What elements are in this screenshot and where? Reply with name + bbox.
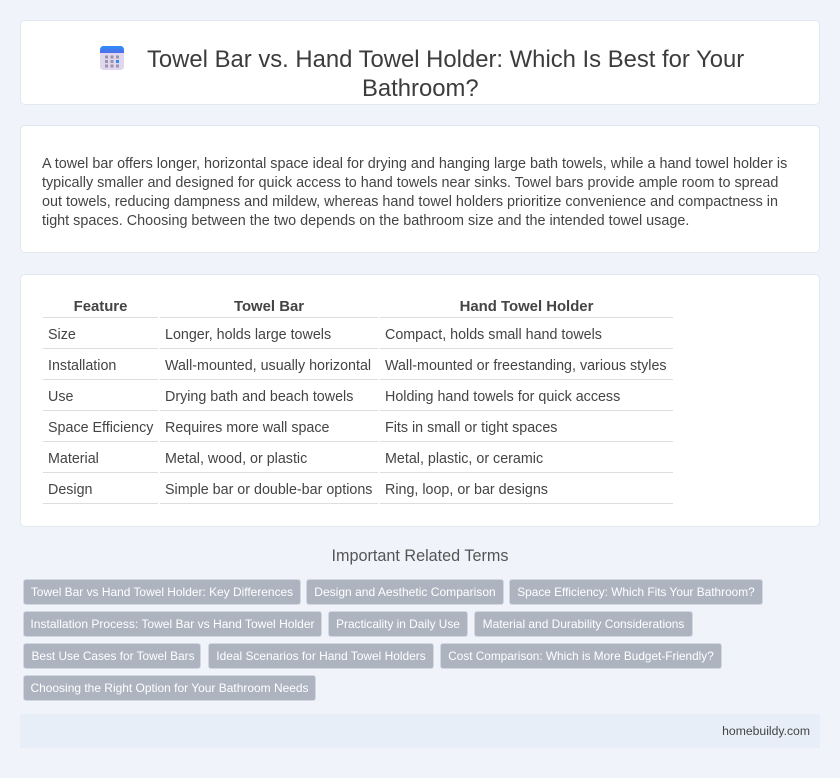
row: material: Metal, plastic, or ceramic xyxy=(385,451,543,467)
row: material: Metal, wood, or plastic xyxy=(165,451,307,467)
intro text xyxy=(42,156,787,229)
panel: comparison table xyxy=(20,274,820,527)
row: design xyxy=(48,482,548,498)
tag xyxy=(474,611,693,637)
heading: related terms: Important Related Terms xyxy=(332,547,508,565)
row: use: Holding hand towels for quick access xyxy=(385,389,620,405)
title: Bathroom? xyxy=(362,75,479,102)
row: installation xyxy=(48,358,667,374)
row: design: Design xyxy=(48,482,93,498)
tag: Practicality in Daily Use xyxy=(336,617,460,631)
title xyxy=(147,46,744,102)
row: size: Compact, holds small hand towels xyxy=(385,327,602,343)
row: material xyxy=(48,451,543,467)
tag: Space Efficiency: Which Fits Your Bathroom? xyxy=(517,585,755,599)
tag xyxy=(23,611,322,637)
row: material: Material xyxy=(48,451,99,467)
row: size: Size xyxy=(48,327,76,343)
row: space efficiency xyxy=(48,420,557,436)
tag xyxy=(208,643,434,669)
row: design: Ring, loop, or bar designs xyxy=(385,482,548,498)
tag: Installation Process: Towel Bar vs Hand Towel Holder xyxy=(30,617,315,631)
row: installation: Wall-mounted or freestanding, various styles xyxy=(385,358,667,374)
tag: Cost Comparison: Which is More Budget-Friendly? xyxy=(448,649,714,663)
table headers: Hand Towel Holder xyxy=(460,299,593,315)
row: use: Use xyxy=(48,389,73,405)
row: space efficiency: Space Efficiency xyxy=(48,420,153,436)
table headers xyxy=(74,299,594,315)
row: installation: Wall-mounted, usually horizontal xyxy=(165,358,371,374)
row: installation: Installation xyxy=(48,358,116,374)
table headers: Feature xyxy=(74,299,127,315)
row: space efficiency: Requires more wall space xyxy=(165,420,329,436)
row: use xyxy=(48,389,620,405)
tag xyxy=(306,579,504,605)
tag xyxy=(23,643,201,669)
tag xyxy=(440,643,722,669)
tag xyxy=(23,579,301,605)
intro text: A towel bar offers longer, horizontal space ideal for drying and hanging large bath towels, while a hand towel holder is xyxy=(42,156,787,172)
tag: Material and Durability Considerations xyxy=(483,617,684,631)
footer source: homebuildy.com xyxy=(722,724,810,738)
row: use: Drying bath and beach towels xyxy=(165,389,353,405)
tag xyxy=(328,611,468,637)
header panel xyxy=(20,20,820,105)
table headers: Towel Bar xyxy=(234,299,304,315)
tag: Choosing the Right Option for Your Bathroom Needs xyxy=(30,681,309,695)
panel: intro paragraph xyxy=(20,125,820,253)
row: design: Simple bar or double-bar options xyxy=(165,482,372,498)
intro text: tight spaces. Choosing between the two depends on the bathroom size and the intended towel usage. xyxy=(42,213,689,229)
row: size: Longer, holds large towels xyxy=(165,327,331,343)
row: space efficiency: Fits in small or tight spaces xyxy=(385,420,557,436)
title: Towel Bar vs. Hand Towel Holder: Which Is Best for Your xyxy=(147,46,744,73)
tag: Design and Aesthetic Comparison xyxy=(314,585,496,599)
row: size xyxy=(48,327,602,343)
tag: Best Use Cases for Towel Bars xyxy=(31,649,195,663)
tag xyxy=(509,579,763,605)
tag xyxy=(23,675,316,701)
tag: Ideal Scenarios for Hand Towel Holders xyxy=(216,649,426,663)
icon: calendar xyxy=(100,46,124,70)
tag: Towel Bar vs Hand Towel Holder: Key Differences xyxy=(31,585,293,599)
footer bar xyxy=(20,714,820,748)
intro text: typically smaller and designed for quick access to hand towels near sinks. Towel bars provide ample room to spread xyxy=(42,175,778,191)
intro text: out towels, reducing dampness and mildew, whereas hand towel holders prioritize convenience and compactness in xyxy=(42,194,778,210)
